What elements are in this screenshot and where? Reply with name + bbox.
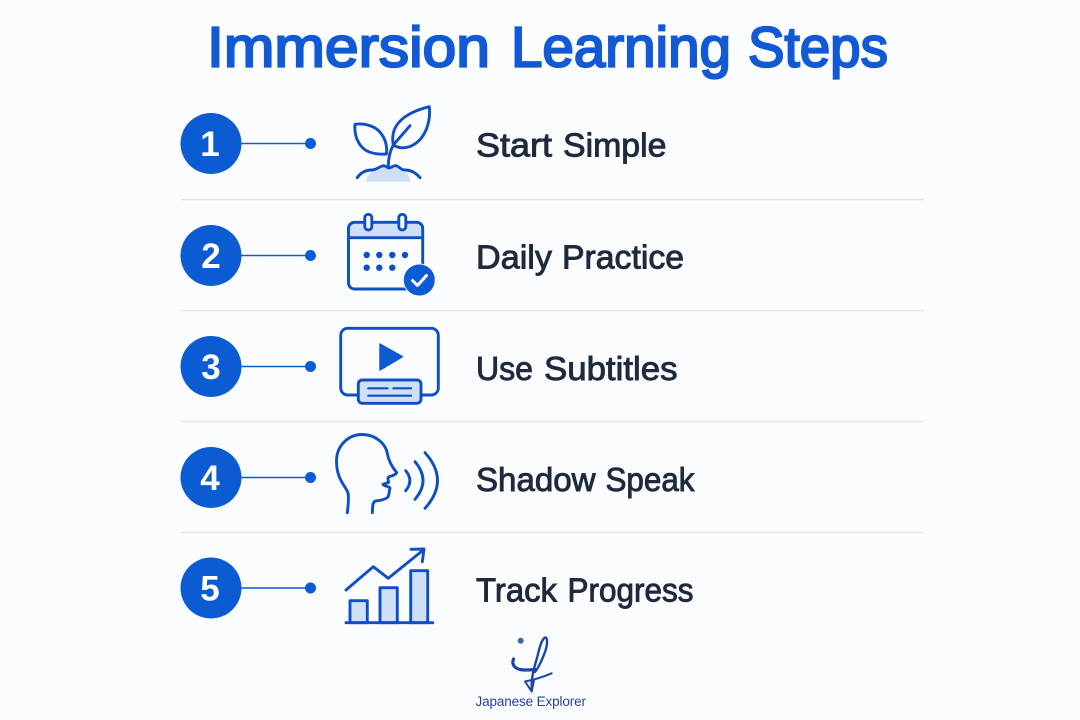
label: Track Progress: Track [476,573,557,610]
number badge 3 [180,336,316,397]
number badge 2: 2 [201,237,221,276]
icon: rising bar chart [346,549,433,623]
label: Use Subtitles: Subtitles [544,351,678,388]
logo: Japanese Explorer [476,637,586,709]
logo wordmark: Japanese Explorer [476,694,586,709]
number badge 4: 4 [200,459,220,498]
logo mark [513,637,552,692]
label: Shadow Speak: Speak [606,462,695,499]
number badge 3: 3 [201,348,221,387]
number badge 4 [180,447,316,508]
number badge 5 [180,558,316,618]
label: Shadow Speak: Shadow [476,462,596,499]
title: Learning [511,16,731,80]
label: Start Simple: Simple [563,128,666,165]
label: Track Progress [476,573,694,610]
step 5: track progress [180,549,694,623]
icon: calendar with check [348,214,435,296]
icon: speaking head [336,434,438,513]
icon: video with subtitles [341,328,438,403]
label: Track Progress: Progress [568,573,694,610]
label: Daily Practice: Daily [476,239,552,276]
number badge 5: 5 [200,570,220,608]
number badge 1 [180,113,316,174]
label: Use Subtitles [476,351,678,388]
step 3: use subtitles [180,328,678,403]
label: Daily Practice [476,239,684,276]
number badge 1: 1 [200,125,220,164]
label: Daily Practice: Practice [562,239,684,276]
step 1: start simple [180,107,666,182]
step 2: daily practice [180,214,684,296]
number badge 2 [180,225,316,286]
label: Shadow Speak [476,462,695,499]
label: Use Subtitles: Use [476,351,533,388]
label: Start Simple [476,128,666,165]
icon: sprout [355,107,430,182]
label: Start Simple: Start [476,128,553,165]
title: Immersion [207,16,490,80]
step 4: shadow speak [180,434,695,513]
title [207,16,888,80]
title: Steps [748,16,888,80]
